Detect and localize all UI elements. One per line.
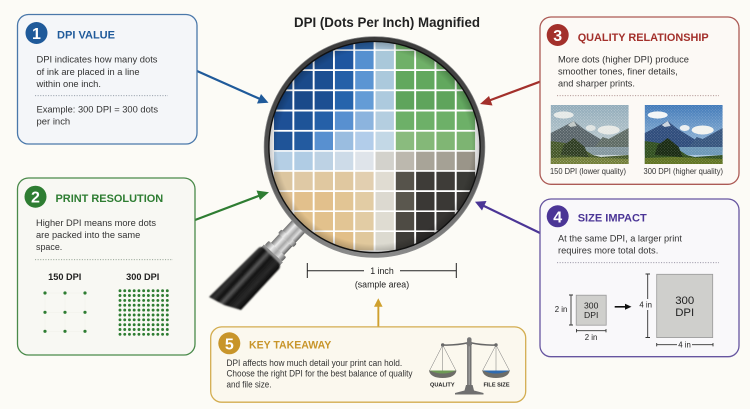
text: example: per inch [36, 117, 70, 128]
arrow: key takeaway to lens [374, 298, 383, 327]
diagram: large 4 in print [639, 274, 713, 349]
heading: DPI value: DPI VALUE [57, 30, 115, 42]
lens ring [264, 37, 485, 257]
caption: 150 DPI: 150 DPI (lower quality) [550, 167, 626, 176]
badge 1: 1 [32, 26, 41, 43]
title: DPI (Dots Per Inch) Magnified [294, 15, 480, 30]
panel: 3 quality relationship [540, 17, 739, 184]
text: explanation: More dots (higher DPI) produce [558, 54, 689, 65]
badge 4: 4 [553, 209, 562, 226]
text: explanation: Higher DPI means more dots [36, 218, 156, 229]
diagram: large 4 in print: 300 [675, 295, 694, 307]
dots: 300 DPI [120, 291, 168, 334]
badge 5 [218, 332, 240, 354]
image: landscape at 150 DPI [551, 105, 629, 164]
text: takeaway: DPI affects how much detail your print can hold. [226, 358, 402, 368]
diagram: large 4 in print: DPI [675, 307, 694, 319]
diagram: large 4 in print: 4 in [639, 301, 652, 310]
sample area measure: (sample area) [355, 280, 409, 290]
text: explanation: requires more total dots. [558, 246, 658, 257]
text: explanation: space. [36, 242, 62, 253]
panel: 1 DPI value [18, 14, 197, 144]
text: explanation: are packed into the same [36, 230, 140, 241]
badge 2 [24, 186, 46, 208]
text: definition: DPI indicates how many dots [36, 55, 158, 66]
arrow: DPI value to lens [197, 71, 268, 104]
heading: quality relationship: QUALITY RELATIONSHIP [578, 32, 709, 44]
diagram: small 2 in print: 2 in [555, 305, 567, 314]
icon: balance scale: QUALITY [430, 382, 455, 388]
arrow: print resolution to lens [195, 190, 269, 220]
panel: 5 key takeaway [211, 327, 526, 402]
panel: 4 size impact [540, 199, 739, 357]
badge 1 [26, 22, 48, 44]
diagram: small 2 in print: 2 in [585, 333, 597, 342]
sample area measure: 1 inch [370, 266, 394, 276]
icon: balance scale [429, 337, 510, 394]
heading: size impact: SIZE IMPACT [578, 213, 647, 225]
text: explanation: and sharper prints. [558, 79, 635, 90]
badge 3: 3 [553, 28, 562, 45]
badge 4 [547, 205, 569, 227]
label: 300 DPI: 300 DPI [126, 272, 159, 282]
magnifying glass [209, 31, 485, 310]
caption: 300 DPI: 300 DPI (higher quality) [644, 167, 723, 176]
diagram: small 2 in print: DPI [584, 310, 598, 320]
diagram: small 2 in print [555, 295, 606, 342]
arrow: small to large print [615, 304, 632, 310]
magnifier handle [209, 216, 310, 310]
text: definition: within one inch. [36, 79, 101, 90]
text: takeaway: and file size. [226, 379, 272, 389]
image: landscape at 300 DPI [645, 105, 723, 164]
heading: print resolution: PRINT RESOLUTION [56, 193, 163, 205]
diagram: large 4 in print: 4 in [678, 340, 691, 349]
diagram: small 2 in print: 300 [584, 300, 599, 310]
text: explanation: smoother tones, finer details, [558, 67, 678, 78]
text: takeaway: Choose the right DPI for the best balance of quality [226, 369, 413, 379]
text: example: Example: 300 DPI = 300 dots [36, 105, 158, 116]
badge 2: 2 [31, 190, 40, 207]
text: explanation: At the same DPI, a larger print [558, 234, 682, 245]
badge 3 [547, 24, 569, 46]
lens grid of colored dots [268, 31, 480, 253]
badge 5: 5 [225, 336, 234, 353]
arrow: quality relationship to lens [480, 82, 540, 106]
heading: key takeaway: KEY TAKEAWAY [249, 339, 332, 351]
dots: 150 DPI [43, 291, 87, 333]
label: 150 DPI: 150 DPI [48, 272, 81, 282]
sample area measure [307, 263, 456, 290]
text: definition: of ink are placed in a line [36, 67, 140, 78]
arrow: size impact to lens [475, 201, 540, 233]
icon: balance scale: FILE SIZE [483, 382, 510, 388]
panel: 2 print resolution [18, 178, 195, 355]
